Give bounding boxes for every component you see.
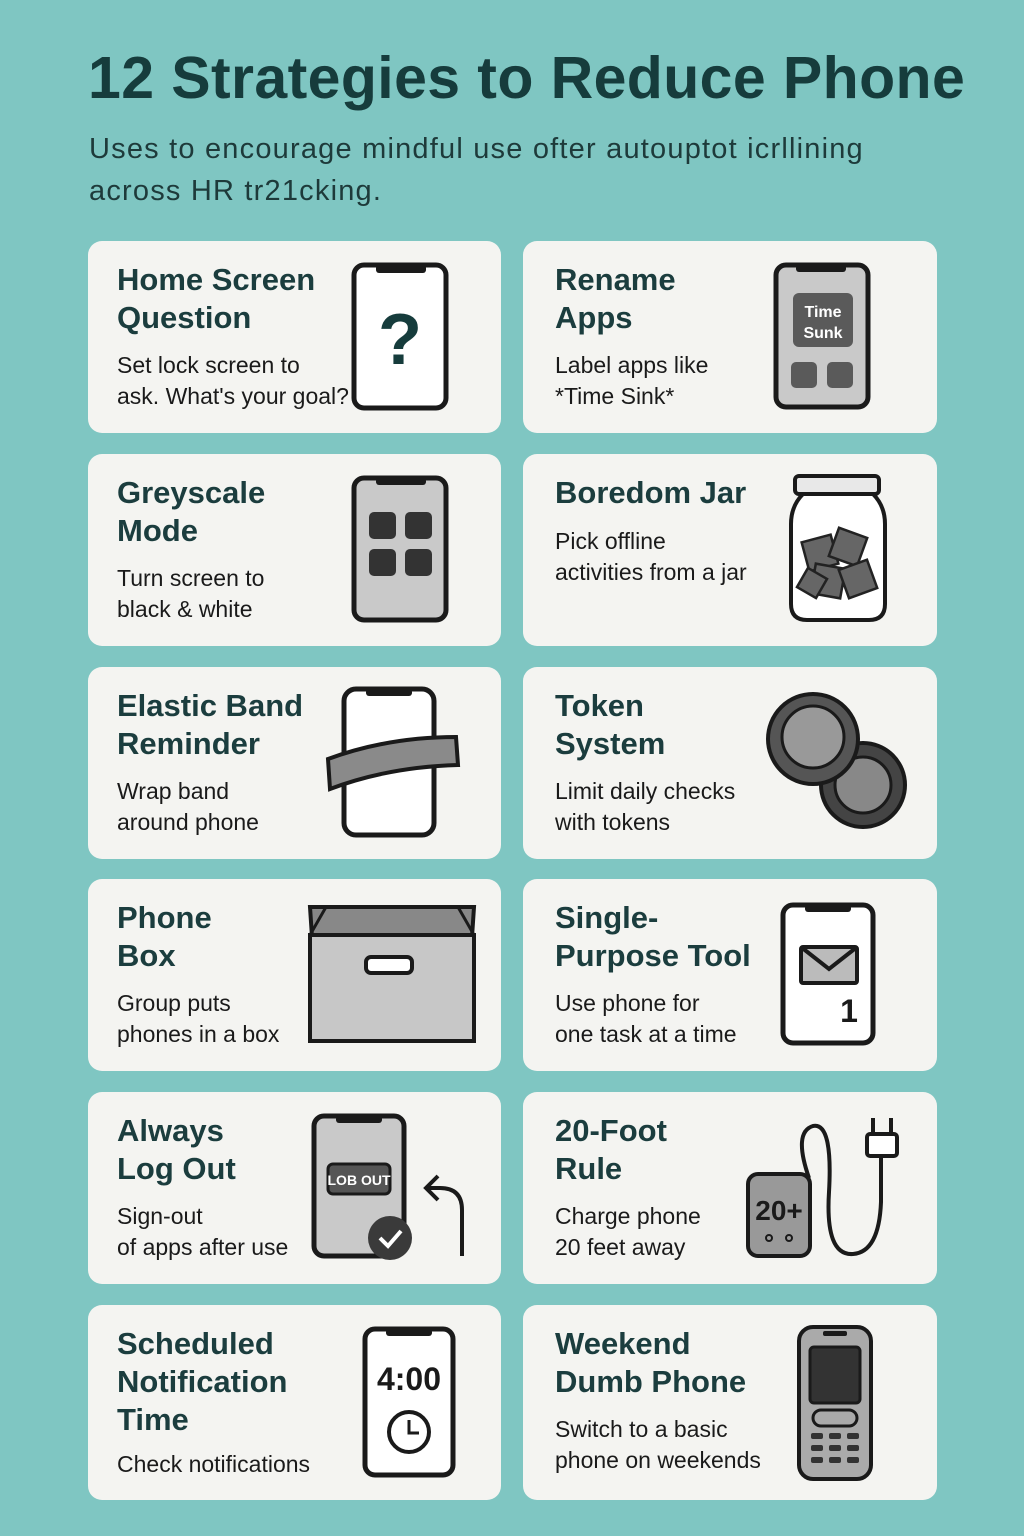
icon: box — [308, 905, 476, 1043]
panel: token system: System — [555, 726, 665, 761]
panel: token system: Token — [555, 688, 644, 723]
panel: always log out — [88, 1092, 501, 1284]
icon: renamed app phone: Sunk — [803, 325, 843, 342]
icon: greyscale phone — [352, 476, 448, 622]
panel: greyscale mode: black & white — [117, 596, 253, 622]
panel: single-purpose tool — [523, 879, 937, 1071]
panel: rename apps: Rename — [555, 262, 676, 297]
panel: home screen question: Question — [117, 300, 251, 335]
panel: boredom jar: activities from a jar — [555, 559, 747, 585]
icon: phone clock: 4:00 — [377, 1361, 441, 1397]
panel: 20-foot rule: Rule — [555, 1151, 622, 1186]
panel: scheduled notification time: Time — [117, 1402, 189, 1437]
panel: boredom jar: Boredom Jar — [555, 475, 746, 510]
panel: always log out: of apps after use — [117, 1234, 288, 1260]
icon: phone with mail: 1 — [840, 993, 858, 1029]
panel: elastic band reminder: Reminder — [117, 726, 260, 761]
icon: charger: 20+ — [755, 1195, 803, 1226]
panel: always log out: Log Out — [117, 1151, 236, 1186]
panel: greyscale mode: Greyscale — [117, 475, 265, 510]
panel: boredom jar: Pick offline — [555, 528, 666, 554]
panel: phone box — [88, 879, 501, 1071]
icon: renamed app phone — [774, 262, 870, 410]
panel: phone box: phones in a box — [117, 1021, 279, 1047]
panel: weekend dumb phone: Weekend — [555, 1326, 691, 1361]
icon: renamed app phone: Time — [804, 304, 842, 321]
panel: token system: with tokens — [555, 809, 670, 835]
panel: elastic band reminder: Elastic Band — [117, 688, 303, 723]
panel: home screen question: Set lock screen to — [117, 352, 300, 378]
panel: greyscale mode — [88, 454, 501, 646]
panel: scheduled notification time: Check notifications — [117, 1451, 310, 1477]
icon: phone with mail — [780, 902, 876, 1046]
panel: token system — [523, 667, 937, 859]
panel: weekend dumb phone: phone on weekends — [555, 1447, 761, 1473]
panel: single-purpose tool: one task at a time — [555, 1021, 737, 1047]
panel: single-purpose tool: Use phone for — [555, 990, 699, 1016]
icon: phone clock — [362, 1326, 456, 1478]
icon: jar — [789, 474, 887, 622]
panel: weekend dumb phone: Switch to a basic — [555, 1416, 728, 1442]
panel: weekend dumb phone: Dumb Phone — [555, 1364, 746, 1399]
panel: greyscale mode: Turn screen to — [117, 565, 264, 591]
panel: home screen question: ask. What's your goal? — [117, 383, 349, 409]
subtitle: Uses to encourage mindful use ofter autouptot icrllining — [89, 133, 864, 165]
icon: phone question — [352, 262, 448, 410]
panel: token system: Limit daily checks — [555, 778, 735, 804]
icon: phone log out: LOB OUT — [328, 1172, 391, 1188]
icon: phone log out — [312, 1114, 464, 1260]
panel: rename apps: *Time Sink* — [555, 383, 674, 409]
panel: rename apps: Label apps like — [555, 352, 708, 378]
panel: elastic band reminder: around phone — [117, 809, 259, 835]
panel: scheduled notification time: Scheduled — [117, 1326, 274, 1361]
panel: home screen question — [88, 241, 501, 433]
subtitle — [89, 133, 864, 207]
icon: phone question: ? — [378, 300, 422, 380]
panel: always log out: Sign-out — [117, 1203, 203, 1229]
panel: always log out: Always — [117, 1113, 224, 1148]
panel: 20-foot rule: 20-Foot — [555, 1113, 667, 1148]
panel: 20-foot rule: 20 feet away — [555, 1234, 685, 1260]
title: 12 Strategies to Reduce Phone — [88, 45, 965, 111]
panel: phone box: Group puts — [117, 990, 231, 1016]
panel: phone box: Phone — [117, 900, 212, 935]
panel: boredom jar — [523, 454, 937, 646]
panel: 20-foot rule — [523, 1092, 937, 1284]
panel: rename apps: Apps — [555, 300, 632, 335]
panel: 20-foot rule: Charge phone — [555, 1203, 701, 1229]
icon: basic phone — [797, 1325, 873, 1481]
panel: scheduled notification time: Notification — [117, 1364, 288, 1399]
panel: greyscale mode: Mode — [117, 513, 198, 548]
panel: phone box: Box — [117, 938, 176, 973]
panel: scheduled notification time — [88, 1305, 501, 1500]
panel: weekend dumb phone — [523, 1305, 937, 1500]
subtitle: across HR tr21cking. — [89, 175, 382, 207]
panel: home screen question: Home Screen — [117, 262, 315, 297]
panel: elastic band reminder — [88, 667, 501, 859]
panel: elastic band reminder: Wrap band — [117, 778, 229, 804]
icon: tokens — [766, 692, 907, 829]
icon: charger — [746, 1118, 899, 1258]
panel: rename apps — [523, 241, 937, 433]
panel: single-purpose tool: Single- — [555, 900, 658, 935]
panel: single-purpose tool: Purpose Tool — [555, 938, 751, 973]
icon: phone with band — [326, 686, 460, 838]
